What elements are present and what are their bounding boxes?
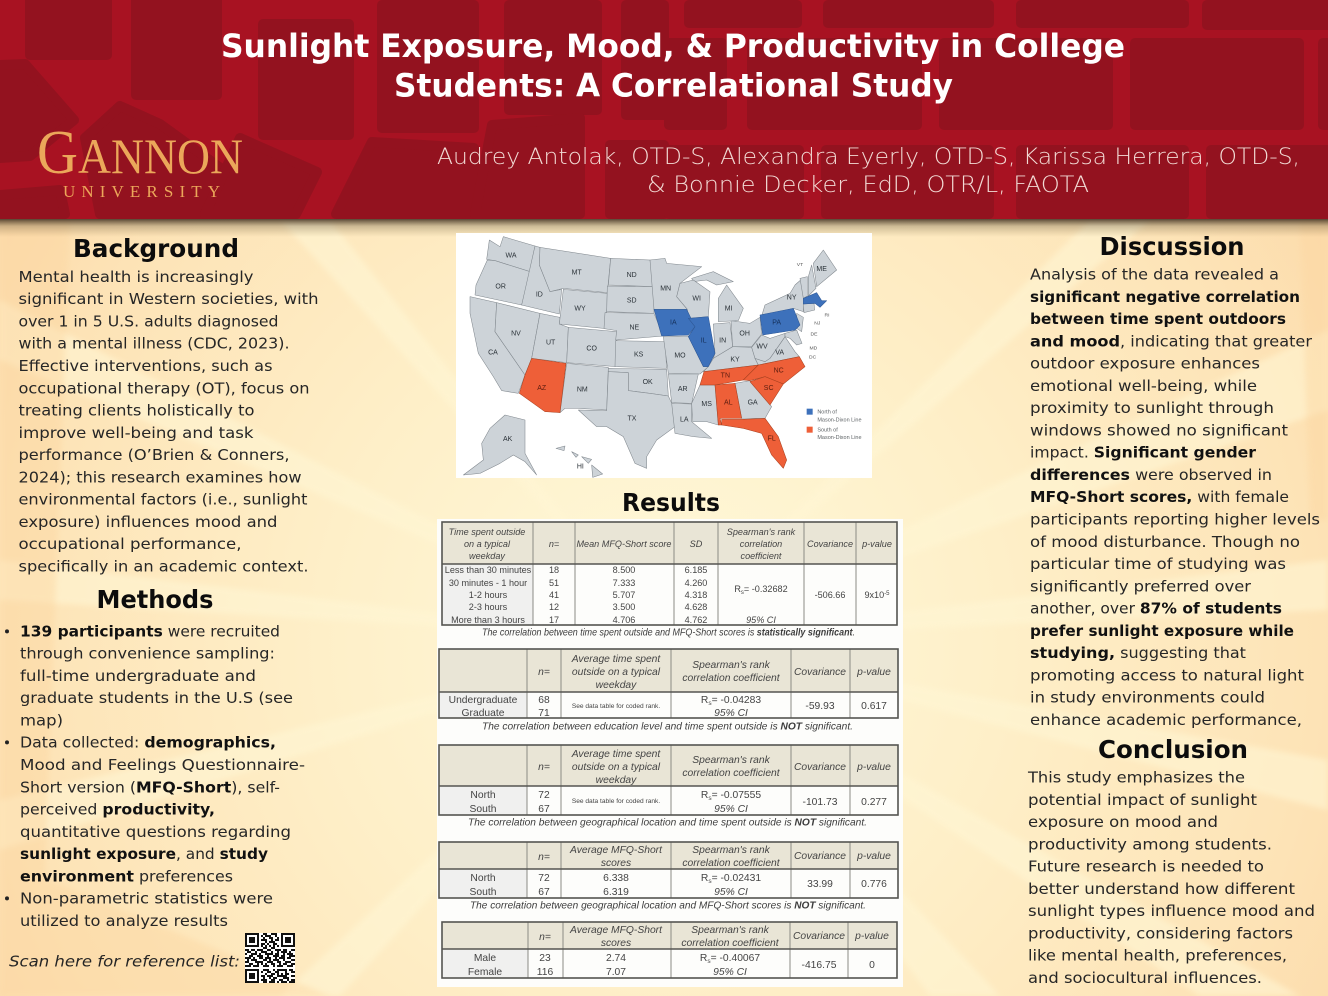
table: location vs time outside: correlation coefficient: [682, 768, 781, 779]
text block: methods bullets: environment preferences: [20, 867, 233, 885]
caption: table 1: The correlation between time spent outside and MFQ-Short scores is statistically significant.: [482, 628, 855, 638]
map: US states by Mason-Dixon line: MS: [701, 401, 712, 408]
map: US states by Mason-Dixon line: AL: [724, 400, 733, 407]
map: US states by Mason-Dixon line: CA: [488, 350, 498, 357]
text block: background: performance (O’Brien & Conners,: [18, 446, 290, 464]
text block: methods bullets: sunlight exposure, and study: [20, 845, 268, 863]
text block: discussion: between time spent outdoors: [1030, 310, 1286, 328]
text block: discussion: significant negative correlation: [1030, 288, 1300, 306]
table: gender vs MFQ-Short: [442, 922, 897, 978]
legend: north and south: Mason-Dixon Line: [817, 417, 862, 423]
table: time outside vs MFQ-Short: 12: [549, 602, 559, 612]
table: location vs MFQ-Short: 6.319: [603, 887, 629, 898]
table: time outside vs MFQ-Short: 41: [549, 590, 559, 600]
table: education level: = -0.04283: [712, 695, 761, 706]
table: gender vs MFQ-Short: 95% CI: [713, 967, 747, 978]
panel: conclusion: [1027, 735, 1315, 987]
table: location vs time outside: s: [708, 795, 712, 802]
text block: conclusion: like mental health, preferences,: [1028, 947, 1287, 965]
table: time outside vs MFQ-Short: 7.333: [613, 578, 635, 588]
map: US states by Mason-Dixon line: VA: [775, 349, 784, 356]
text block: background: occupational performance,: [18, 535, 242, 553]
text block: discussion: proximity to sunlight through: [1030, 399, 1274, 417]
authors: [437, 144, 1300, 198]
map: US states by Mason-Dixon line: IL: [701, 337, 707, 344]
table: education level: s: [708, 700, 712, 707]
map: US states by Mason-Dixon line: KY: [730, 356, 740, 363]
map: US states by Mason-Dixon line: [456, 233, 872, 478]
map: US states by Mason-Dixon line: FL: [768, 436, 776, 443]
title: Students: A Correlational Study: [394, 66, 953, 104]
table: gender vs MFQ-Short: Spearman's rank: [691, 925, 770, 936]
map: US states by Mason-Dixon line: AK: [503, 436, 513, 443]
map: US states by Mason-Dixon line: TX: [628, 416, 637, 423]
map: US states by Mason-Dixon line: MN: [660, 286, 671, 293]
text block: methods bullets: Short version (MFQ-Short), self-: [20, 778, 280, 796]
table: location vs MFQ-Short: correlation coefficient: [682, 858, 781, 869]
table: gender vs MFQ-Short: n=: [539, 932, 551, 943]
map: US states by Mason-Dixon line: CO: [586, 345, 597, 352]
table: education level: outside on a typical: [572, 667, 661, 678]
table: education level: 95% CI: [714, 708, 748, 719]
text block: conclusion: better understand how different: [1028, 880, 1295, 898]
table: time outside vs MFQ-Short: s: [741, 590, 744, 596]
table: location vs MFQ-Short: 6.338: [603, 873, 629, 884]
table: time outside vs MFQ-Short: Mean MFQ-Short score: [576, 539, 672, 549]
table: time outside vs MFQ-Short: 4.260: [685, 578, 707, 588]
table: gender vs MFQ-Short: 116: [537, 967, 553, 978]
text block: discussion: outdoor exposure enhances: [1030, 355, 1260, 373]
map: US states by Mason-Dixon line: NM: [577, 386, 588, 393]
table: location vs time outside: 0.277: [861, 797, 887, 808]
table: education level: weekday: [596, 680, 637, 691]
table: time outside vs MFQ-Short: weekday: [469, 551, 505, 561]
panel: methods: [5, 585, 305, 930]
text block: discussion: windows showed no significant: [1030, 421, 1288, 439]
text block: background: occupational therapy (OT), focus on: [18, 379, 310, 397]
heading: results: Results: [622, 488, 720, 517]
table: time outside vs MFQ-Short: 4.762: [685, 615, 707, 625]
text block: discussion: in study environments could: [1030, 689, 1265, 707]
table: location vs MFQ-Short: 0.776: [861, 879, 887, 890]
table: time outside vs MFQ-Short: 30 minutes - 1 hour: [449, 578, 527, 588]
map: US states by Mason-Dixon line: SD: [627, 297, 637, 304]
text block: background: improve well-being and task: [18, 424, 254, 442]
table: time outside vs MFQ-Short: 4.628: [685, 602, 707, 612]
text block: methods bullets: Mood and Feelings Questionnaire-: [20, 756, 305, 774]
table: time outside vs MFQ-Short: p-value: [861, 539, 892, 549]
text block: background: Effective interventions, such as: [18, 357, 272, 375]
map: US states by Mason-Dixon line: OH: [739, 330, 750, 337]
table: time outside vs MFQ-Short: = -0.32682: [744, 584, 788, 594]
table: time outside vs MFQ-Short: on a typical: [464, 539, 511, 549]
map: US states by Mason-Dixon line: TN: [721, 372, 730, 379]
text block: discussion: participants reporting higher levels: [1030, 510, 1320, 528]
text block: background: Mental health is increasingly: [18, 268, 253, 286]
table: education level: See data table for coded rank.: [572, 703, 660, 710]
map: US states by Mason-Dixon line: SC: [764, 385, 774, 392]
text block: background: significant in Western societies, with: [18, 290, 318, 308]
map: US states by Mason-Dixon line: ID: [536, 292, 543, 299]
panel: discussion: [1030, 232, 1320, 729]
map: US states by Mason-Dixon line: MO: [674, 352, 686, 359]
table: time outside vs MFQ-Short: R: [734, 584, 741, 594]
header shadow: [0, 219, 1328, 237]
table: gender vs MFQ-Short: Male: [474, 953, 496, 964]
text block: background: with a mental illness (CDC, 2023).: [18, 335, 290, 353]
text block: discussion: enhance academic performance,: [1030, 711, 1302, 729]
legend: north and south: Mason-Dixon Line: [817, 435, 862, 441]
heading: background: Background: [73, 234, 239, 263]
table: location vs time outside: -101.73: [803, 797, 838, 808]
table: education level: 0.617: [861, 701, 887, 712]
table: location vs time outside: n=: [538, 762, 550, 773]
table: time outside vs MFQ-Short: -506.66: [815, 590, 845, 600]
map: US states by Mason-Dixon line: MI: [725, 306, 733, 313]
table: location vs MFQ-Short: n=: [538, 852, 550, 863]
table: location vs MFQ-Short: North: [470, 873, 496, 884]
legend: north and south: South of: [817, 427, 838, 433]
table: location vs MFQ-Short: 67: [538, 887, 550, 898]
table: education level: p-value: [856, 667, 891, 678]
title: [221, 27, 1125, 104]
table: time outside vs MFQ-Short: 5.707: [613, 590, 635, 600]
map: US states by Mason-Dixon line: WA: [505, 253, 517, 260]
map: US states by Mason-Dixon line: OK: [643, 379, 653, 386]
table: education level: n=: [538, 667, 550, 678]
text block: background: specifically in an academic context.: [18, 557, 309, 575]
map: US states by Mason-Dixon line: AR: [678, 386, 688, 393]
text block: conclusion: productivity among students.: [1028, 835, 1272, 853]
table: location vs time outside: [439, 745, 898, 815]
text block: discussion: studying, suggesting that: [1030, 644, 1246, 662]
table: time outside vs MFQ-Short: 8.500: [613, 565, 635, 575]
table: location vs time outside: R: [701, 790, 708, 801]
table: time outside vs MFQ-Short: n=: [549, 539, 559, 549]
map: US states by Mason-Dixon line: IA: [670, 319, 677, 326]
title: Sunlight Exposure, Mood, & Productivity in College: [221, 27, 1125, 65]
text block: conclusion: [1027, 768, 1315, 987]
table: location vs time outside: North: [470, 790, 496, 801]
map: US states by Mason-Dixon line: MD: [809, 345, 818, 351]
text block: discussion: of mood disturbance. Though no: [1030, 533, 1300, 551]
table: location vs time outside: outside on a typical: [572, 762, 661, 773]
text block: methods bullets: perceived productivity,: [20, 800, 215, 818]
table: gender vs MFQ-Short: -416.75: [802, 960, 837, 971]
table: education level: [439, 649, 898, 719]
table: location vs MFQ-Short: = -0.02431: [712, 873, 761, 884]
map: US states by Mason-Dixon line: OR: [495, 284, 506, 291]
table: location vs MFQ-Short: Average MFQ-Short: [569, 845, 663, 856]
text block: background: 2024); this research examines how: [18, 468, 302, 486]
text block: methods bullets: full-time undergraduate and: [20, 667, 256, 685]
text block: background: [18, 268, 318, 575]
table: education level: Spearman's rank: [692, 660, 771, 671]
text block: discussion: [1030, 266, 1320, 729]
table: location vs MFQ-Short: 33.99: [807, 879, 833, 890]
text block: methods bullets: map): [20, 711, 63, 729]
table: location vs time outside: p-value: [856, 762, 891, 773]
text block: methods bullets: [5, 622, 305, 930]
map: US states by Mason-Dixon line: WI: [692, 296, 701, 303]
table: time outside vs MFQ-Short: Spearman's rank: [727, 527, 796, 537]
table: location vs MFQ-Short: South: [470, 887, 497, 898]
table: education level: 68: [538, 695, 550, 706]
table: gender vs MFQ-Short: Average MFQ-Short: [569, 925, 663, 936]
text block: methods bullets: graduate students in the U.S (see: [20, 689, 293, 707]
table: gender vs MFQ-Short: s: [707, 958, 711, 965]
table: location vs MFQ-Short: R: [701, 873, 708, 884]
text block: conclusion: This study emphasizes the: [1027, 768, 1245, 786]
table: time outside vs MFQ-Short: 18: [549, 565, 559, 575]
table: education level: R: [701, 695, 708, 706]
table: time outside vs MFQ-Short: -5: [884, 591, 890, 597]
table: time outside vs MFQ-Short: More than 3 hours: [451, 615, 525, 625]
table: location vs time outside: South: [470, 804, 497, 815]
map: US states by Mason-Dixon line: PA: [772, 319, 781, 326]
table: gender vs MFQ-Short: Covariance: [793, 931, 845, 942]
table: time outside vs MFQ-Short: coefficient: [741, 551, 782, 561]
table: location vs time outside: 72: [538, 790, 550, 801]
table: time outside vs MFQ-Short: 1-2 hours: [469, 590, 508, 600]
table: time outside vs MFQ-Short: 9x10: [864, 590, 884, 600]
table: location vs MFQ-Short: 72: [538, 873, 550, 884]
text block: discussion: differences were observed in: [1030, 466, 1272, 484]
map: US states by Mason-Dixon line: NE: [629, 324, 640, 331]
heading: conclusion: Conclusion: [1098, 735, 1248, 764]
table: education level: correlation coefficient: [682, 673, 781, 684]
text block: methods bullets: Non-parametric statistics were: [20, 890, 273, 908]
table: time outside vs MFQ-Short: 51: [549, 578, 559, 588]
table: location vs MFQ-Short: Spearman's rank: [692, 845, 771, 856]
table: gender vs MFQ-Short: 23: [539, 953, 551, 964]
table: time outside vs MFQ-Short: SD: [690, 539, 703, 549]
caption: table 2: The correlation between education level and time spent outside is NOT significant.: [482, 722, 853, 732]
table: location vs MFQ-Short: p-value: [856, 851, 891, 862]
table: location vs time outside: Covariance: [794, 762, 846, 773]
table: gender vs MFQ-Short: = -0.40067: [711, 953, 760, 964]
table: location vs time outside: Spearman's rank: [692, 755, 771, 766]
text block: conclusion: exposure on mood and: [1028, 813, 1218, 831]
text block: discussion: prefer sunlight exposure while: [1030, 622, 1294, 640]
text block: methods bullets: quantitative questions regarding: [20, 823, 291, 841]
table: location vs time outside: Average time spent: [571, 749, 661, 760]
table: time outside vs MFQ-Short: [442, 522, 897, 625]
text block: methods bullets: 139 participants were recruited: [20, 622, 280, 640]
text block: conclusion: potential impact of sunlight: [1028, 791, 1257, 809]
legend: north and south: North of: [817, 409, 837, 415]
heading: discussion: Discussion: [1100, 232, 1244, 261]
table: education level: 71: [538, 708, 550, 719]
text block: discussion: another, over 87% of students: [1030, 600, 1282, 618]
text block: methods bullets: utilized to analyze results: [20, 912, 228, 930]
map: US states by Mason-Dixon line: NV: [511, 330, 521, 337]
text block: discussion: impact. Significant gender: [1030, 444, 1256, 462]
text block: background: over 1 in 5 U.S. adults diagnosed: [18, 312, 278, 330]
table: gender vs MFQ-Short: 2.74: [606, 953, 626, 964]
reference list prompt: Scan here for reference list:: [9, 952, 240, 970]
table: location vs time outside: 67: [538, 804, 550, 815]
table: time outside vs MFQ-Short: Covariance: [807, 539, 853, 549]
logo: Gannon University: UNIVERSITY: [63, 182, 220, 201]
map: US states by Mason-Dixon line: GA: [748, 400, 758, 407]
map: US states by Mason-Dixon line: UT: [546, 340, 556, 347]
text block: discussion: MFQ-Short scores, with female: [1030, 488, 1289, 506]
table: time outside vs MFQ-Short: 17: [549, 615, 559, 625]
text block: discussion: Analysis of the data revealed a: [1030, 266, 1279, 284]
heading: methods: Methods: [96, 585, 214, 614]
table: location vs MFQ-Short: 95% CI: [714, 887, 748, 898]
table: time outside vs MFQ-Short: 4.318: [685, 590, 707, 600]
caption: table 3: The correlation between geographical location and time spent outside is NOT significant.: [468, 818, 867, 828]
table: location vs MFQ-Short: s: [708, 878, 712, 885]
table: time outside vs MFQ-Short: 4.706: [613, 615, 635, 625]
map: US states by Mason-Dixon line: MT: [572, 270, 582, 277]
table: education level: Covariance: [794, 667, 846, 678]
text block: background: environmental factors (i.e., sunlight: [18, 491, 308, 509]
table: location vs time outside: weekday: [596, 775, 637, 786]
map: US states by Mason-Dixon line: WV: [756, 344, 768, 351]
text block: discussion: promoting access to natural light: [1030, 666, 1304, 684]
table: time outside vs MFQ-Short: 2-3 hours: [469, 602, 508, 612]
icon: QR code: [245, 933, 295, 983]
table: location vs time outside: = -0.07555: [712, 790, 761, 801]
text block: conclusion: productivity, considering factors: [1028, 924, 1293, 942]
text block: discussion: particular time of studying was: [1030, 555, 1286, 573]
authors: & Bonnie Decker, EdD, OTR/L, FAOTA: [647, 172, 1089, 198]
table: education level: Undergraduate: [449, 695, 518, 706]
table: gender vs MFQ-Short: p-value: [854, 931, 889, 942]
table: education level: -59.93: [805, 701, 835, 712]
map: US states by Mason-Dixon line: KS: [634, 352, 644, 359]
table: gender vs MFQ-Short: Female: [468, 967, 502, 978]
table: time outside vs MFQ-Short: correlation: [740, 539, 782, 549]
table: time outside vs MFQ-Short: 95% CI: [746, 615, 776, 625]
map: US states by Mason-Dixon line: RI: [824, 313, 829, 319]
map: US states by Mason-Dixon line: IN: [719, 338, 726, 345]
table: gender vs MFQ-Short: scores: [601, 938, 631, 949]
map: US states by Mason-Dixon line: NY: [787, 294, 797, 301]
text block: conclusion: Future research is needed to: [1028, 858, 1264, 876]
text block: discussion: emotional well-being, while: [1030, 377, 1257, 395]
map: US states by Mason-Dixon line: NJ: [814, 320, 821, 326]
map: US states by Mason-Dixon line: LA: [680, 416, 689, 423]
table: location vs MFQ-Short: Covariance: [794, 851, 846, 862]
text block: background: exposure) influences mood and: [18, 513, 278, 531]
authors: Audrey Antolak, OTD-S, Alexandra Eyerly, OTD-S, Karissa Herrera, OTD-S,: [437, 144, 1300, 170]
text block: conclusion: and sociocultural influences.: [1028, 969, 1262, 987]
table: location vs MFQ-Short: [439, 842, 898, 898]
table: gender vs MFQ-Short: correlation coefficient: [681, 938, 780, 949]
map: US states by Mason-Dixon line: ND: [627, 272, 637, 279]
text block: discussion: and mood, indicating that greater: [1030, 332, 1313, 350]
legend: north and south: [807, 409, 862, 441]
map: US states by Mason-Dixon line: ME: [816, 266, 827, 273]
table: location vs time outside: 95% CI: [714, 804, 748, 815]
text block: background: treating clients holistically to: [18, 402, 255, 420]
logo: Gannon University: GANNON: [37, 119, 243, 187]
map: US states by Mason-Dixon line: WY: [574, 306, 586, 313]
table: location vs MFQ-Short: scores: [601, 858, 631, 869]
table: gender vs MFQ-Short: R: [700, 953, 707, 964]
text block: methods bullets: Data collected: demographics,: [20, 734, 276, 752]
table: time outside vs MFQ-Short: 6.185: [685, 565, 707, 575]
text block: conclusion: sunlight types influence mood and: [1028, 902, 1315, 920]
table: education level: Average time spent: [571, 654, 661, 665]
map: US states by Mason-Dixon line: HI: [577, 463, 584, 470]
map: US states by Mason-Dixon line: NC: [774, 368, 784, 375]
map: US states by Mason-Dixon line: VT: [797, 262, 803, 268]
caption: table 4: The correlation between geographical location and MFQ-Short scores is NOT significant.: [470, 900, 866, 912]
table: time outside vs MFQ-Short: Less than 30 minutes: [445, 565, 532, 575]
header banner: [0, 0, 1328, 219]
panel: background: [18, 234, 318, 575]
text block: methods bullets: through convenience sampling:: [20, 645, 275, 663]
table: time outside vs MFQ-Short: Time spent outside: [449, 527, 525, 537]
table: time outside vs MFQ-Short: 3.500: [613, 602, 635, 612]
map: US states by Mason-Dixon line: DC: [809, 355, 817, 361]
panel: results tables: [437, 519, 903, 987]
table: location vs time outside: See data table for coded rank.: [572, 798, 660, 805]
table: education level: Graduate: [462, 708, 505, 719]
map: US states by Mason-Dixon line: AZ: [537, 385, 547, 392]
table: gender vs MFQ-Short: 0: [869, 960, 875, 971]
map: US states by Mason-Dixon line: DE: [811, 332, 818, 338]
text block: discussion: significantly preferred over: [1030, 577, 1252, 595]
table: gender vs MFQ-Short: 7.07: [606, 967, 626, 978]
